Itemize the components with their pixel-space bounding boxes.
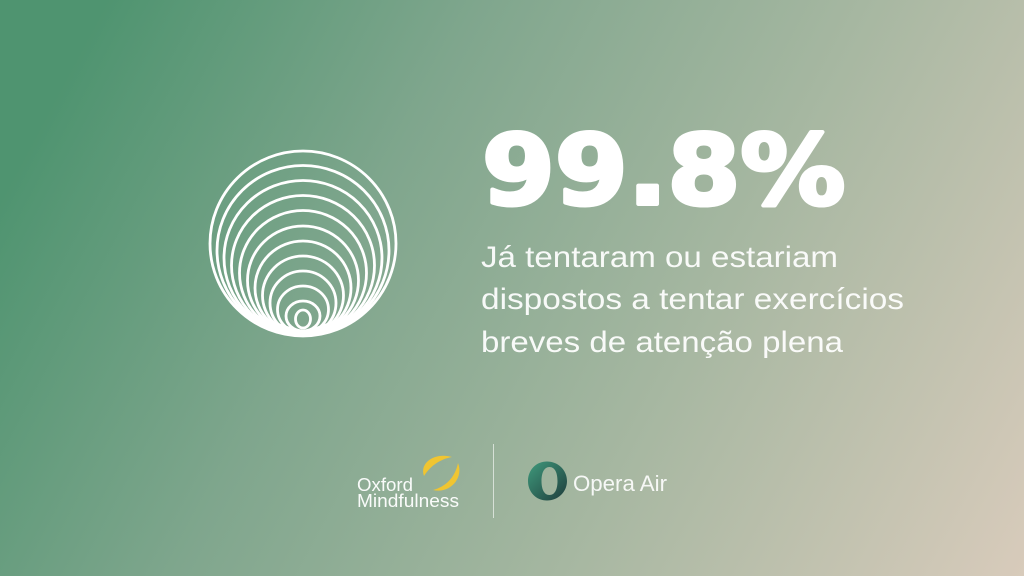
description text: Já tentaram ou estariam: [481, 241, 838, 274]
icon: solid crescent at ring base: [240, 310, 366, 334]
icon: Opera ring: [528, 462, 567, 500]
text: Oxford Mindfulness: Oxford: [357, 475, 413, 495]
text: Oxford Mindfulness: [357, 475, 459, 511]
logo: Opera Air: [528, 462, 667, 500]
icon: concentric rings: [210, 151, 396, 336]
divider between logos: [493, 444, 494, 518]
text: Oxford Mindfulness: Mindfulness: [357, 491, 459, 511]
icon: yellow crescents: [423, 456, 459, 491]
logo: Oxford Mindfulness: [357, 456, 459, 511]
statistic: 99.8%: 99.8%: [482, 114, 845, 227]
description text: [481, 241, 904, 359]
description text: breves de atenção plena: [481, 326, 843, 359]
text: Opera Air: Opera Air: [573, 471, 667, 496]
description text: dispostos a tentar exercícios: [481, 283, 904, 316]
